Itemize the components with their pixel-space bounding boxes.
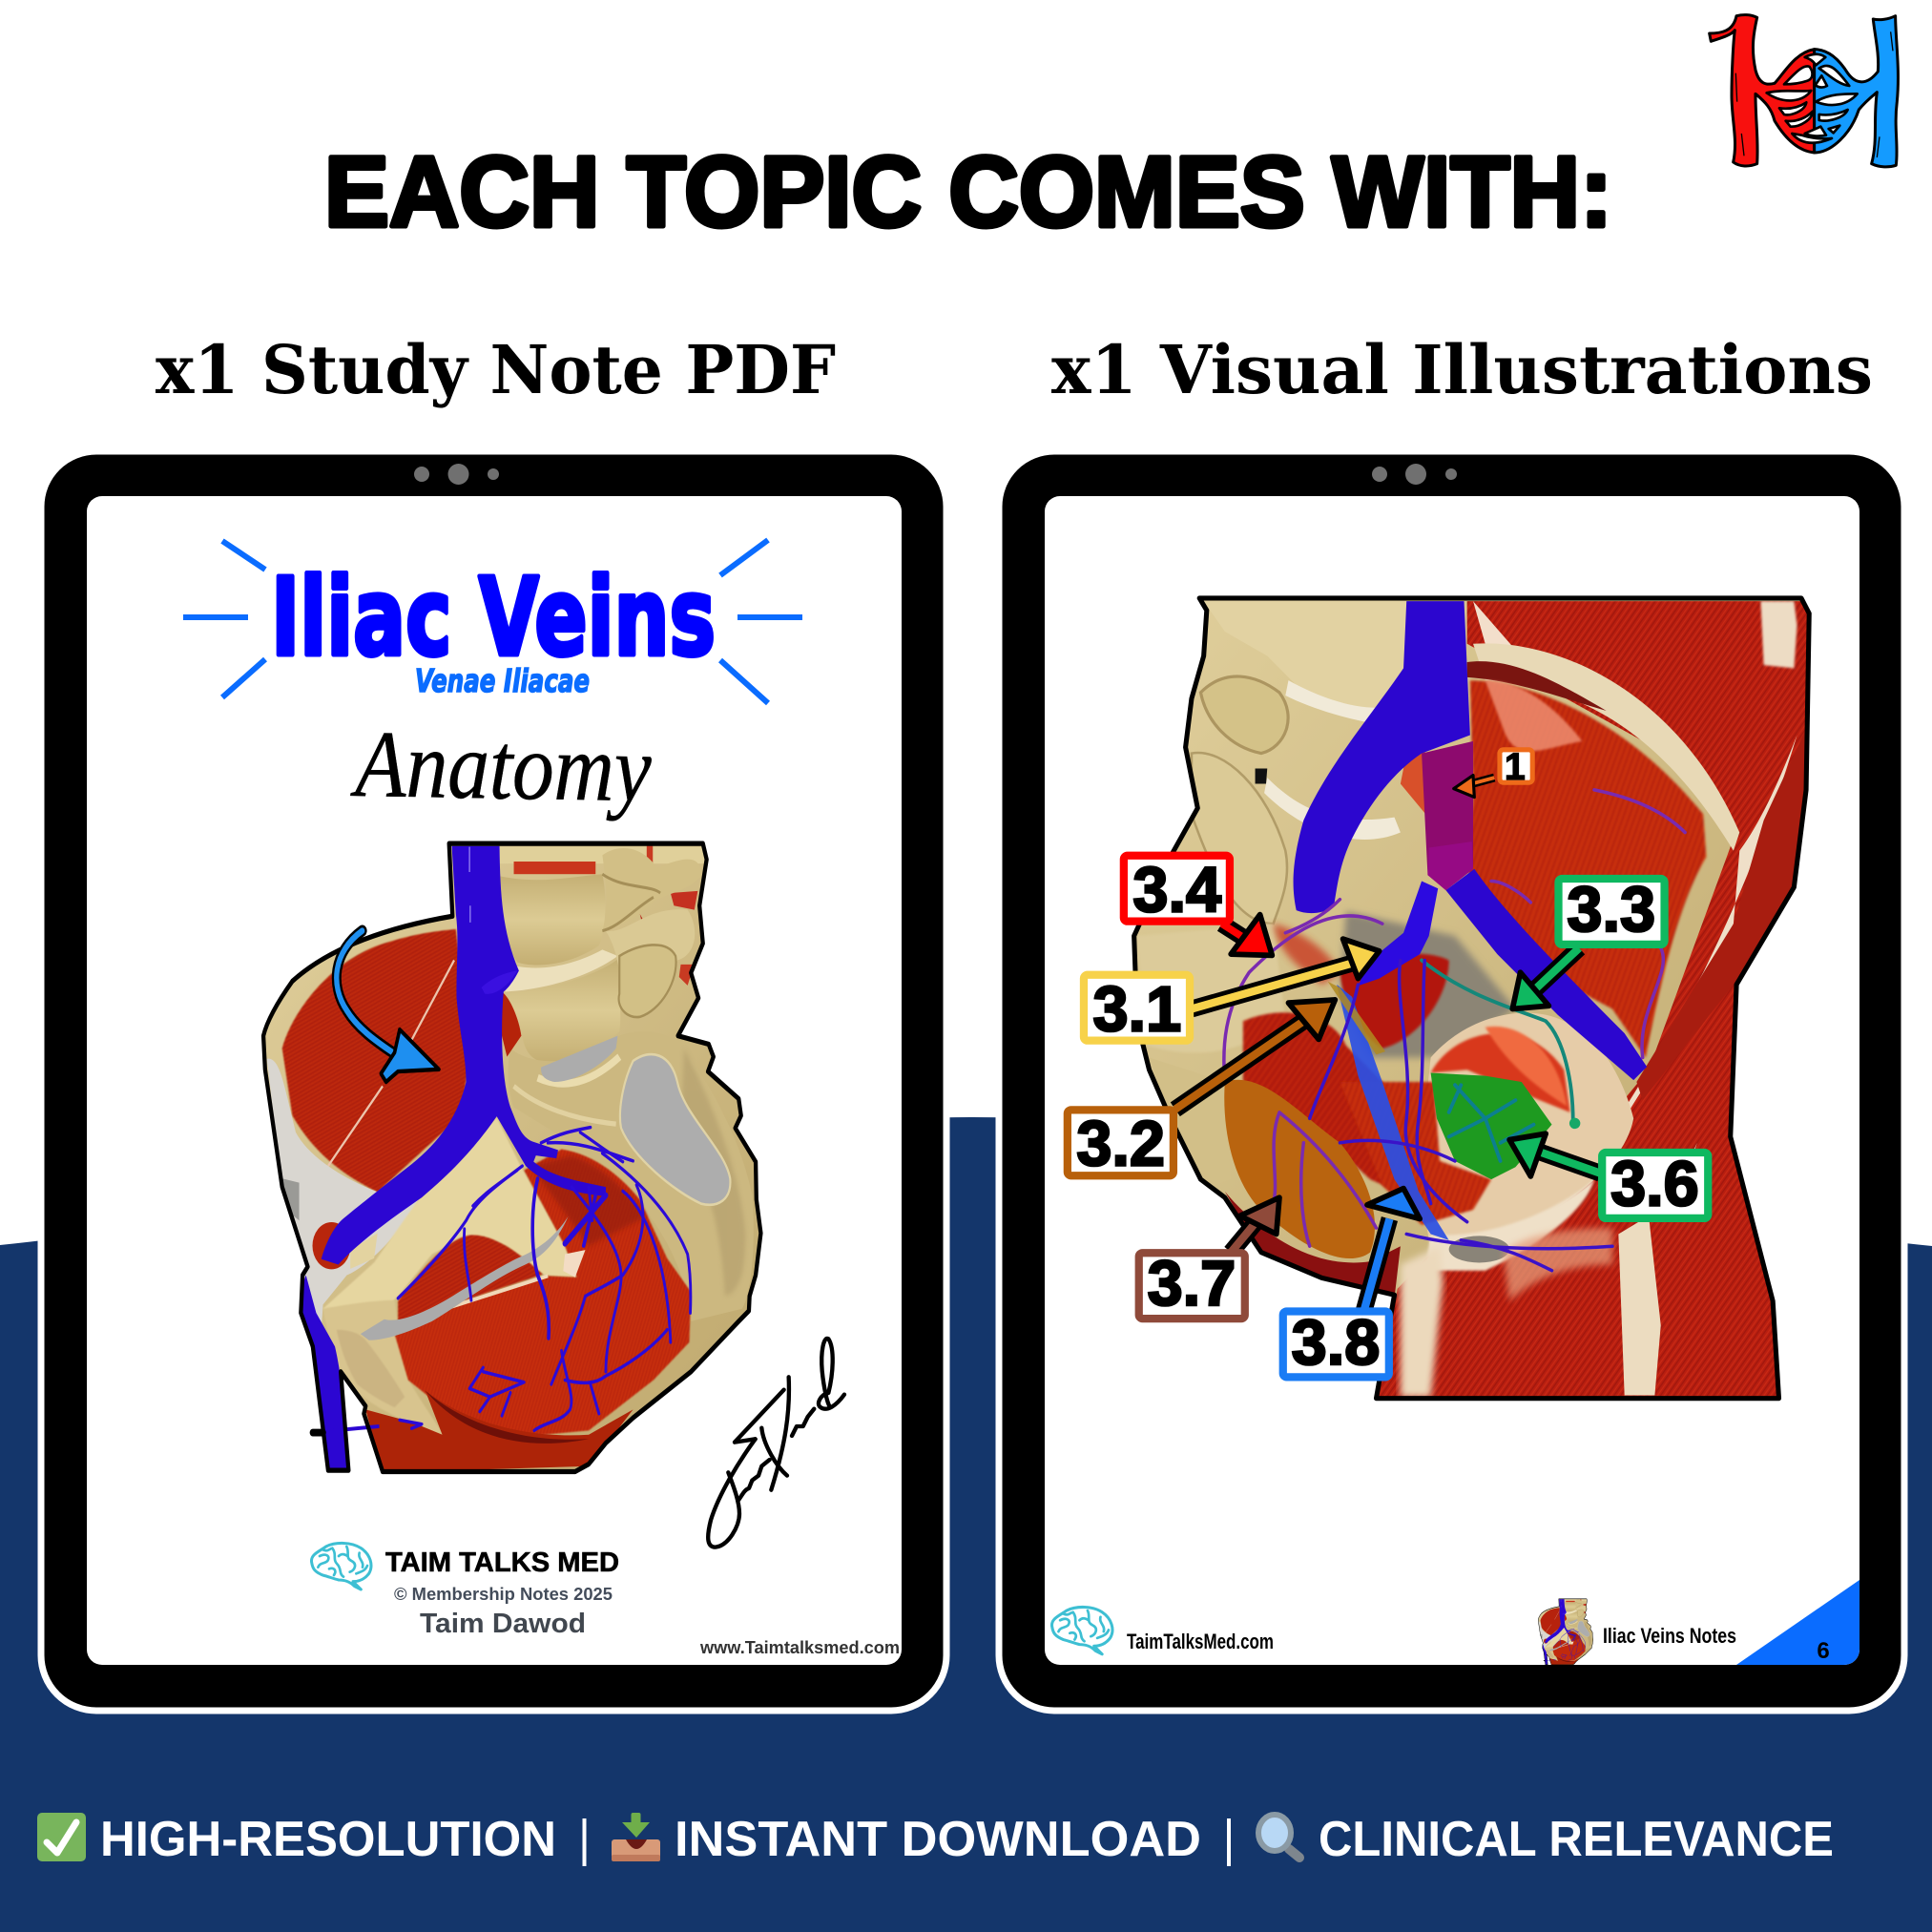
label 1 — [1500, 746, 1532, 788]
thigh muscle base — [1376, 601, 1807, 1399]
piriformis orange overlay — [1224, 1080, 1375, 1258]
arrow: label 3.1 — [1192, 939, 1380, 1008]
arrow: label 3.3 — [1512, 948, 1579, 1008]
label 3.6: 3.6 — [1610, 1149, 1699, 1220]
footer topic name: Iliac Veins Notes — [1603, 1624, 1736, 1648]
heading: study note: x1 Study Note PDF — [156, 330, 836, 409]
panel: right tablet — [999, 451, 1904, 1711]
icon: brain — [311, 1543, 371, 1589]
author: Taim Dawod — [420, 1609, 586, 1639]
arrow: label 1 — [1454, 776, 1494, 798]
footer thumbnail — [1538, 1599, 1593, 1665]
hip joint — [1419, 1013, 1633, 1253]
green obturator overlay — [1431, 1072, 1552, 1179]
lower thigh cream tendons — [1401, 1246, 1443, 1397]
tablet camera dots — [414, 464, 499, 485]
label 3.1: 3.1 — [1093, 974, 1181, 1045]
fine vessels — [1224, 790, 1685, 1271]
label 3.7: 3.7 — [1148, 1249, 1236, 1319]
website: www.Taimtalksmed.com — [699, 1638, 900, 1657]
page number: 6 — [1817, 1638, 1830, 1664]
icon: magnifier — [1258, 1815, 1299, 1858]
subtitle: Venae Iliacae: Venae Iliacae — [415, 662, 590, 699]
corner page tab — [1736, 1580, 1859, 1665]
handwritten heading: Anatomy: Anatomy — [349, 711, 653, 821]
upper tendon edges — [1760, 601, 1797, 668]
purple common iliac overlay — [1422, 741, 1473, 890]
separator — [1227, 1818, 1231, 1866]
sartorius strip — [1629, 735, 1797, 1109]
illustration: pelvic veins anatomy — [263, 843, 760, 1472]
decorative blue rays — [183, 540, 802, 703]
brand name: TAIM TALKS MED — [385, 1548, 619, 1578]
iliacus inner muscle — [1467, 680, 1706, 1058]
footer icon: brain — [1052, 1607, 1112, 1654]
footer website: TaimTalksMed.com — [1127, 1630, 1274, 1653]
tablet camera dots — [1372, 464, 1457, 485]
red muscle around obturator — [1340, 1082, 1491, 1225]
icon: artery capillary vein logo — [1710, 15, 1898, 167]
feature strip — [37, 1812, 1834, 1867]
text: high resolution: HIGH-RESOLUTION — [100, 1812, 556, 1867]
arrow: label 3.7 — [1231, 1197, 1279, 1253]
page title: Iliac Veins: Iliac Veins — [271, 556, 716, 680]
label 1: 1 — [1505, 746, 1526, 788]
icon: blue curved arrow — [337, 931, 439, 1082]
icon: check mark — [37, 1813, 86, 1861]
title: EACH TOPIC COMES WITH: — [324, 136, 1612, 248]
lumbar and sacral bone detail — [1204, 601, 1409, 717]
arrow: label 3.4 — [1222, 915, 1272, 955]
text: clinical relevance: CLINICAL RELEVANCE — [1319, 1812, 1834, 1867]
heading: visual illustrations: x1 Visual Illustrations — [1051, 330, 1873, 409]
arrow: label 3.6 — [1509, 1133, 1600, 1176]
label 3.2: 3.2 — [1076, 1109, 1165, 1179]
label 3.3: 3.3 — [1567, 875, 1655, 945]
text: instant download: INSTANT DOWNLOAD — [675, 1812, 1201, 1867]
signature — [708, 1339, 844, 1548]
icon: download tray — [612, 1813, 660, 1861]
navy curved background — [0, 1117, 1932, 1932]
separator — [582, 1818, 586, 1866]
arrow: label 3.2 — [1175, 1000, 1335, 1110]
deep pelvis shadow — [1340, 911, 1515, 1058]
screen — [1045, 496, 1859, 1665]
brand block — [311, 1543, 619, 1639]
veins — [1294, 601, 1470, 913]
panel: left tablet — [41, 451, 946, 1711]
copyright line: © Membership Notes 2025 — [394, 1585, 613, 1604]
screen — [87, 496, 902, 1665]
label 3.8: 3.8 — [1292, 1308, 1380, 1379]
illustration: labelled pelvis — [1068, 598, 1809, 1399]
arrow: label 3.8 — [1364, 1189, 1420, 1310]
arch band — [1473, 643, 1739, 851]
label 3.4: 3.4 — [1132, 855, 1221, 925]
